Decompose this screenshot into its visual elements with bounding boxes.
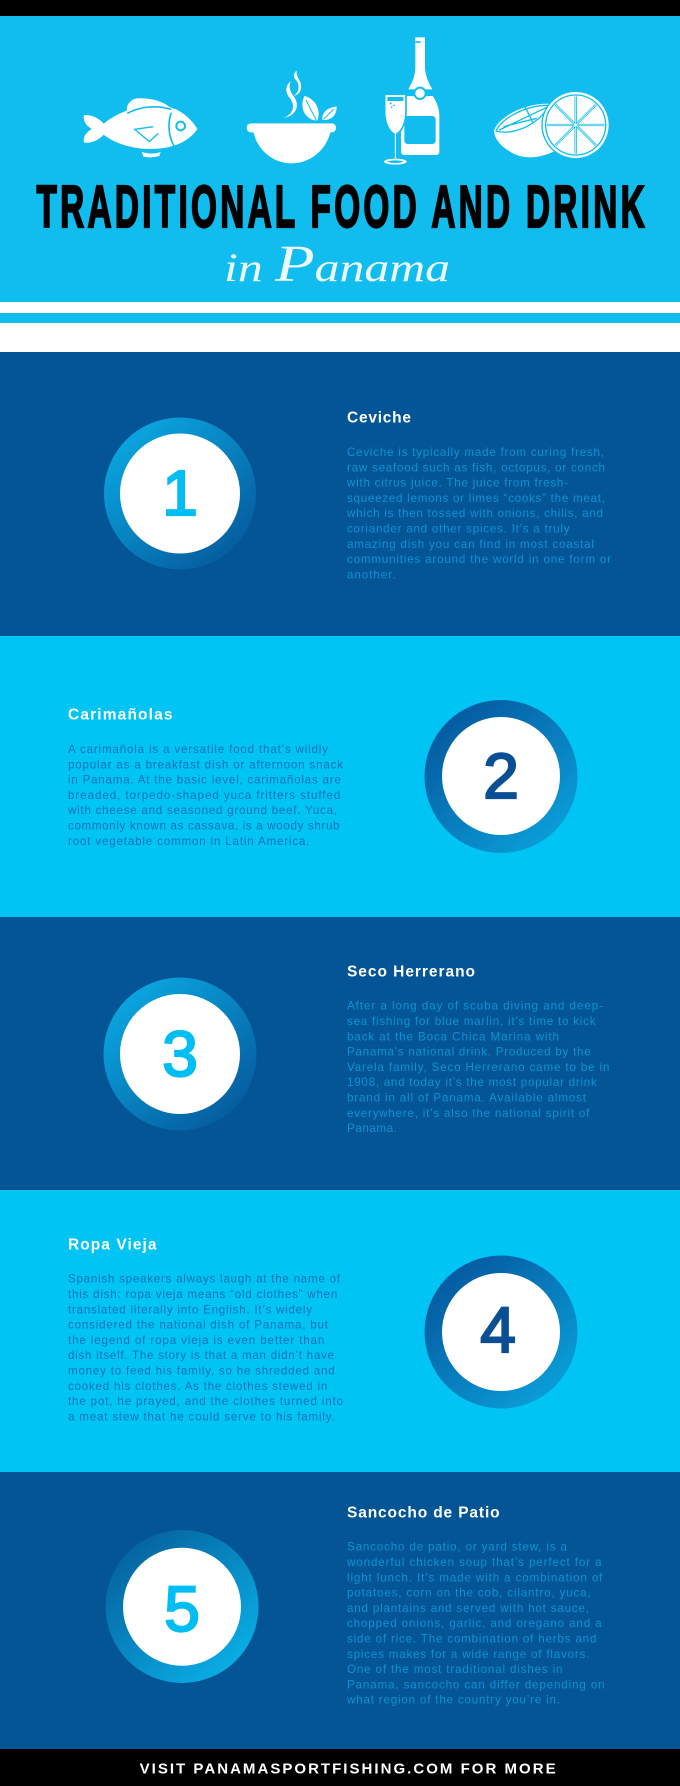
text: Carimañolas description: popular as a breakfast dish or afternoon snack	[68, 758, 343, 771]
text: Ceviche description: with citrus juice. The juice from fresh-	[346, 477, 568, 490]
text: Ceviche description	[346, 446, 611, 581]
number badge 3: 3	[162, 1018, 198, 1090]
icon: citrus halves	[494, 91, 610, 159]
text: Carimañolas description: with cheese and seasoned ground beef. Yuca,	[67, 804, 337, 817]
text: Sancocho de Patio description: One of the most traditional dishes in	[347, 1663, 562, 1676]
text: Carimañolas description: root vegetable common in Latin America.	[68, 835, 310, 848]
text: Seco Herrerano description: everywhere, it’s also the national spirit of	[347, 1107, 590, 1120]
number badge 5: 5	[164, 1573, 200, 1645]
text: Seco Herrerano description: Panama.	[347, 1122, 397, 1135]
text: Seco Herrerano description: sea fishing for blue marlin, it’s time to kick	[347, 1015, 596, 1028]
panel: 2 Carimañolas	[0, 636, 680, 917]
text: Ropa Vieja description: cooked his clothes. As the clothes stewed in	[68, 1380, 327, 1393]
text: Ceviche description: which is then tossed with onions, chilis, and	[346, 507, 603, 520]
header banner	[0, 16, 680, 302]
text: Ceviche description: coriander and other spices. It’s a truly	[347, 522, 570, 536]
text: Ropa Vieja description: Spanish speakers always laugh at the name of	[68, 1273, 341, 1286]
text: Sancocho de Patio description: Sancocho de patio, or yard stew, is a	[347, 1541, 568, 1554]
text: Sancocho de Patio description: light lunch. It’s made with a combination of	[347, 1571, 603, 1584]
text: Ceviche description: Ceviche is typically made from curing fresh,	[347, 446, 604, 459]
text: Seco Herrerano description: brand in all of Panama. Available almost	[347, 1092, 587, 1104]
text: Carimañolas description: commonly known as cassava, is a woody shrub	[68, 820, 340, 832]
text: Ropa Vieja description: the legend of ropa vieja is even better than	[68, 1334, 324, 1347]
text: Seco Herrerano description: 1908, and today it’s the most popular drink	[347, 1076, 597, 1089]
text: Seco Herrerano description: Varela family, Seco Herrerano came to be in	[347, 1061, 609, 1074]
text: Sancocho de Patio description: side of rice. The combination of herbs and	[347, 1632, 596, 1646]
text: Ropa Vieja description: the pot, he prayed, and the clothes turned into	[68, 1395, 343, 1408]
text: Seco Herrerano description	[347, 1000, 609, 1135]
heading: Seco Herrerano: Seco Herrerano	[347, 963, 475, 980]
text: Ceviche description: amazing dish you can find in most coastal	[347, 538, 594, 551]
panel: 1 Ceviche	[0, 352, 680, 636]
text: Ceviche description: another.	[347, 568, 396, 581]
subtitle: in Panama	[224, 236, 450, 293]
footer bar	[0, 1749, 680, 1786]
text: Ropa Vieja description: translated literally into English. It’s widely	[68, 1303, 312, 1316]
text: Ceviche description: raw seafood such as fish, octopus, or conch	[347, 461, 605, 474]
icon: steaming bowl with leaves	[247, 71, 337, 163]
panel: 3 Seco Herrerano	[0, 917, 680, 1190]
text: Ropa Vieja description: considered the national dish of Panama, but	[68, 1319, 329, 1332]
heading: Sancocho de Patio: Sancocho de Patio	[347, 1504, 500, 1521]
text: Sancocho de Patio description: and plantains and served with hot sauce,	[347, 1602, 589, 1615]
text: Ceviche description: squeezed lemons or limes “cooks” the meat,	[347, 492, 605, 505]
number badge 3	[104, 978, 256, 1130]
text: Sancocho de Patio description: what region of the country you’re in.	[346, 1694, 560, 1707]
text: Carimañolas description: A carimañola is a versatile food that’s wildly	[68, 743, 328, 756]
number badge 4: 4	[480, 1294, 516, 1366]
footer call to action: VISIT PANAMASPORTFISHING.COM FOR MORE	[140, 1760, 556, 1778]
white and cyan stripes	[0, 302, 680, 352]
top black bar	[0, 0, 680, 16]
number badge 2: 2	[483, 740, 519, 812]
heading: Ropa Vieja: Ropa Vieja	[68, 1236, 157, 1253]
text: Seco Herrerano description: Panama’s national drink. Produced by the	[347, 1046, 591, 1059]
text: Sancocho de Patio description	[346, 1541, 605, 1707]
number badge 4	[424, 1256, 578, 1408]
text: Sancocho de Patio description: Panama, sancocho can differ depending on	[347, 1678, 605, 1691]
text: Carimañolas description: breaded, torpedo-shaped yuca fritters stuffed	[68, 789, 340, 802]
heading: Ceviche: Ceviche	[347, 410, 411, 427]
text: Ropa Vieja description: dish itself. The story is that a man didn’t have	[68, 1349, 334, 1362]
number badge 2	[424, 700, 578, 853]
text: Ceviche description: communities around the world in one form or	[347, 553, 611, 566]
text: Seco Herrerano description: After a long day of scuba diving and deep-	[347, 1000, 603, 1013]
text: Ropa Vieja description: a meat stew that he could serve to his family.	[68, 1410, 335, 1423]
number badge 5	[106, 1530, 258, 1683]
text: Sancocho de Patio description: potatoes, corn on the cob, cilantro, yuca,	[347, 1587, 591, 1600]
heading: Carimañolas: Carimañolas	[68, 706, 172, 723]
text: Sancocho de Patio description: wonderful chicken soup that’s perfect for a	[346, 1556, 602, 1569]
panel: 5 Sancocho de Patio	[0, 1472, 680, 1749]
icon: champagne bottle and glass	[384, 37, 439, 165]
number badge 1: 1	[162, 457, 198, 529]
text: Carimañolas description	[67, 743, 343, 848]
title: TRADITIONAL FOOD AND DRINK	[36, 174, 645, 241]
text: Seco Herrerano description: back at the Boca Chica Marina with	[347, 1030, 559, 1043]
panel: 4 Ropa Vieja	[0, 1190, 680, 1472]
text: Carimañolas description: in Panama. At the basic level, carimañolas are	[68, 774, 341, 787]
number badge 1	[104, 418, 256, 570]
text: Ropa Vieja description	[68, 1273, 343, 1423]
text: Ropa Vieja description: money to feed his family, so he shredded and	[68, 1364, 335, 1378]
text: Ropa Vieja description: this dish: ropa vieja means “old clothes” when	[68, 1288, 337, 1301]
text: Sancocho de Patio description: spices makes for a wide range of flavors.	[347, 1648, 589, 1661]
icon: fish	[84, 98, 197, 157]
text: Sancocho de Patio description: chopped onions, garlic, and oregano and a	[347, 1617, 602, 1630]
